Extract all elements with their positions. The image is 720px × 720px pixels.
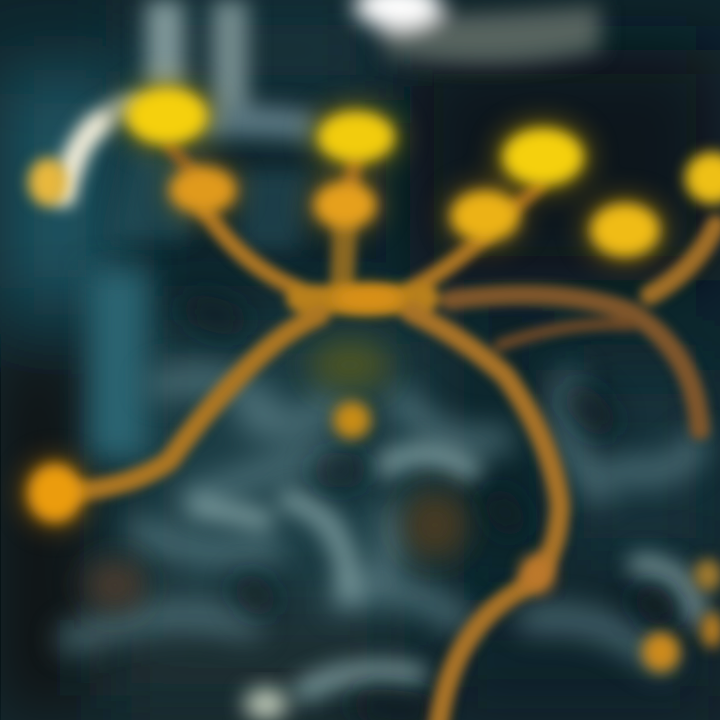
node: far right xyxy=(685,152,720,204)
node: top row 1 xyxy=(127,88,207,144)
branch: far right xyxy=(650,225,716,295)
node: second row 1 xyxy=(170,167,236,213)
node: left white-yellow xyxy=(28,158,68,206)
branch: centre up xyxy=(342,225,345,285)
node: centre small xyxy=(333,401,371,439)
yellow nodes xyxy=(28,88,720,672)
long right trunk xyxy=(410,312,560,720)
bottom pale highlight xyxy=(244,688,288,720)
branch: secondary right arcs xyxy=(450,295,700,430)
arc at upper left xyxy=(64,105,135,195)
branch: upper left xyxy=(205,210,300,290)
node: top row 3 xyxy=(503,129,583,185)
node: right mid xyxy=(591,204,659,256)
hub xyxy=(300,298,425,300)
node: lower right trunk xyxy=(519,554,555,594)
node: right edge upper xyxy=(694,559,720,591)
top machinery xyxy=(110,0,600,250)
node: large left orange xyxy=(28,464,82,522)
dim side details xyxy=(85,339,467,611)
node: top row 2 xyxy=(318,112,394,162)
node: right edge lower xyxy=(701,612,720,648)
node glows xyxy=(23,82,665,527)
orange network connections xyxy=(55,145,716,720)
node: second row 3 xyxy=(451,191,519,241)
long left trunk xyxy=(55,315,320,493)
lower grey-blue machinery xyxy=(70,310,695,710)
node: bottom right xyxy=(642,632,680,672)
node: hub glow xyxy=(334,284,402,312)
branch: upper right xyxy=(400,235,485,295)
left blue column xyxy=(88,270,148,460)
node: second row 2 xyxy=(314,182,376,228)
